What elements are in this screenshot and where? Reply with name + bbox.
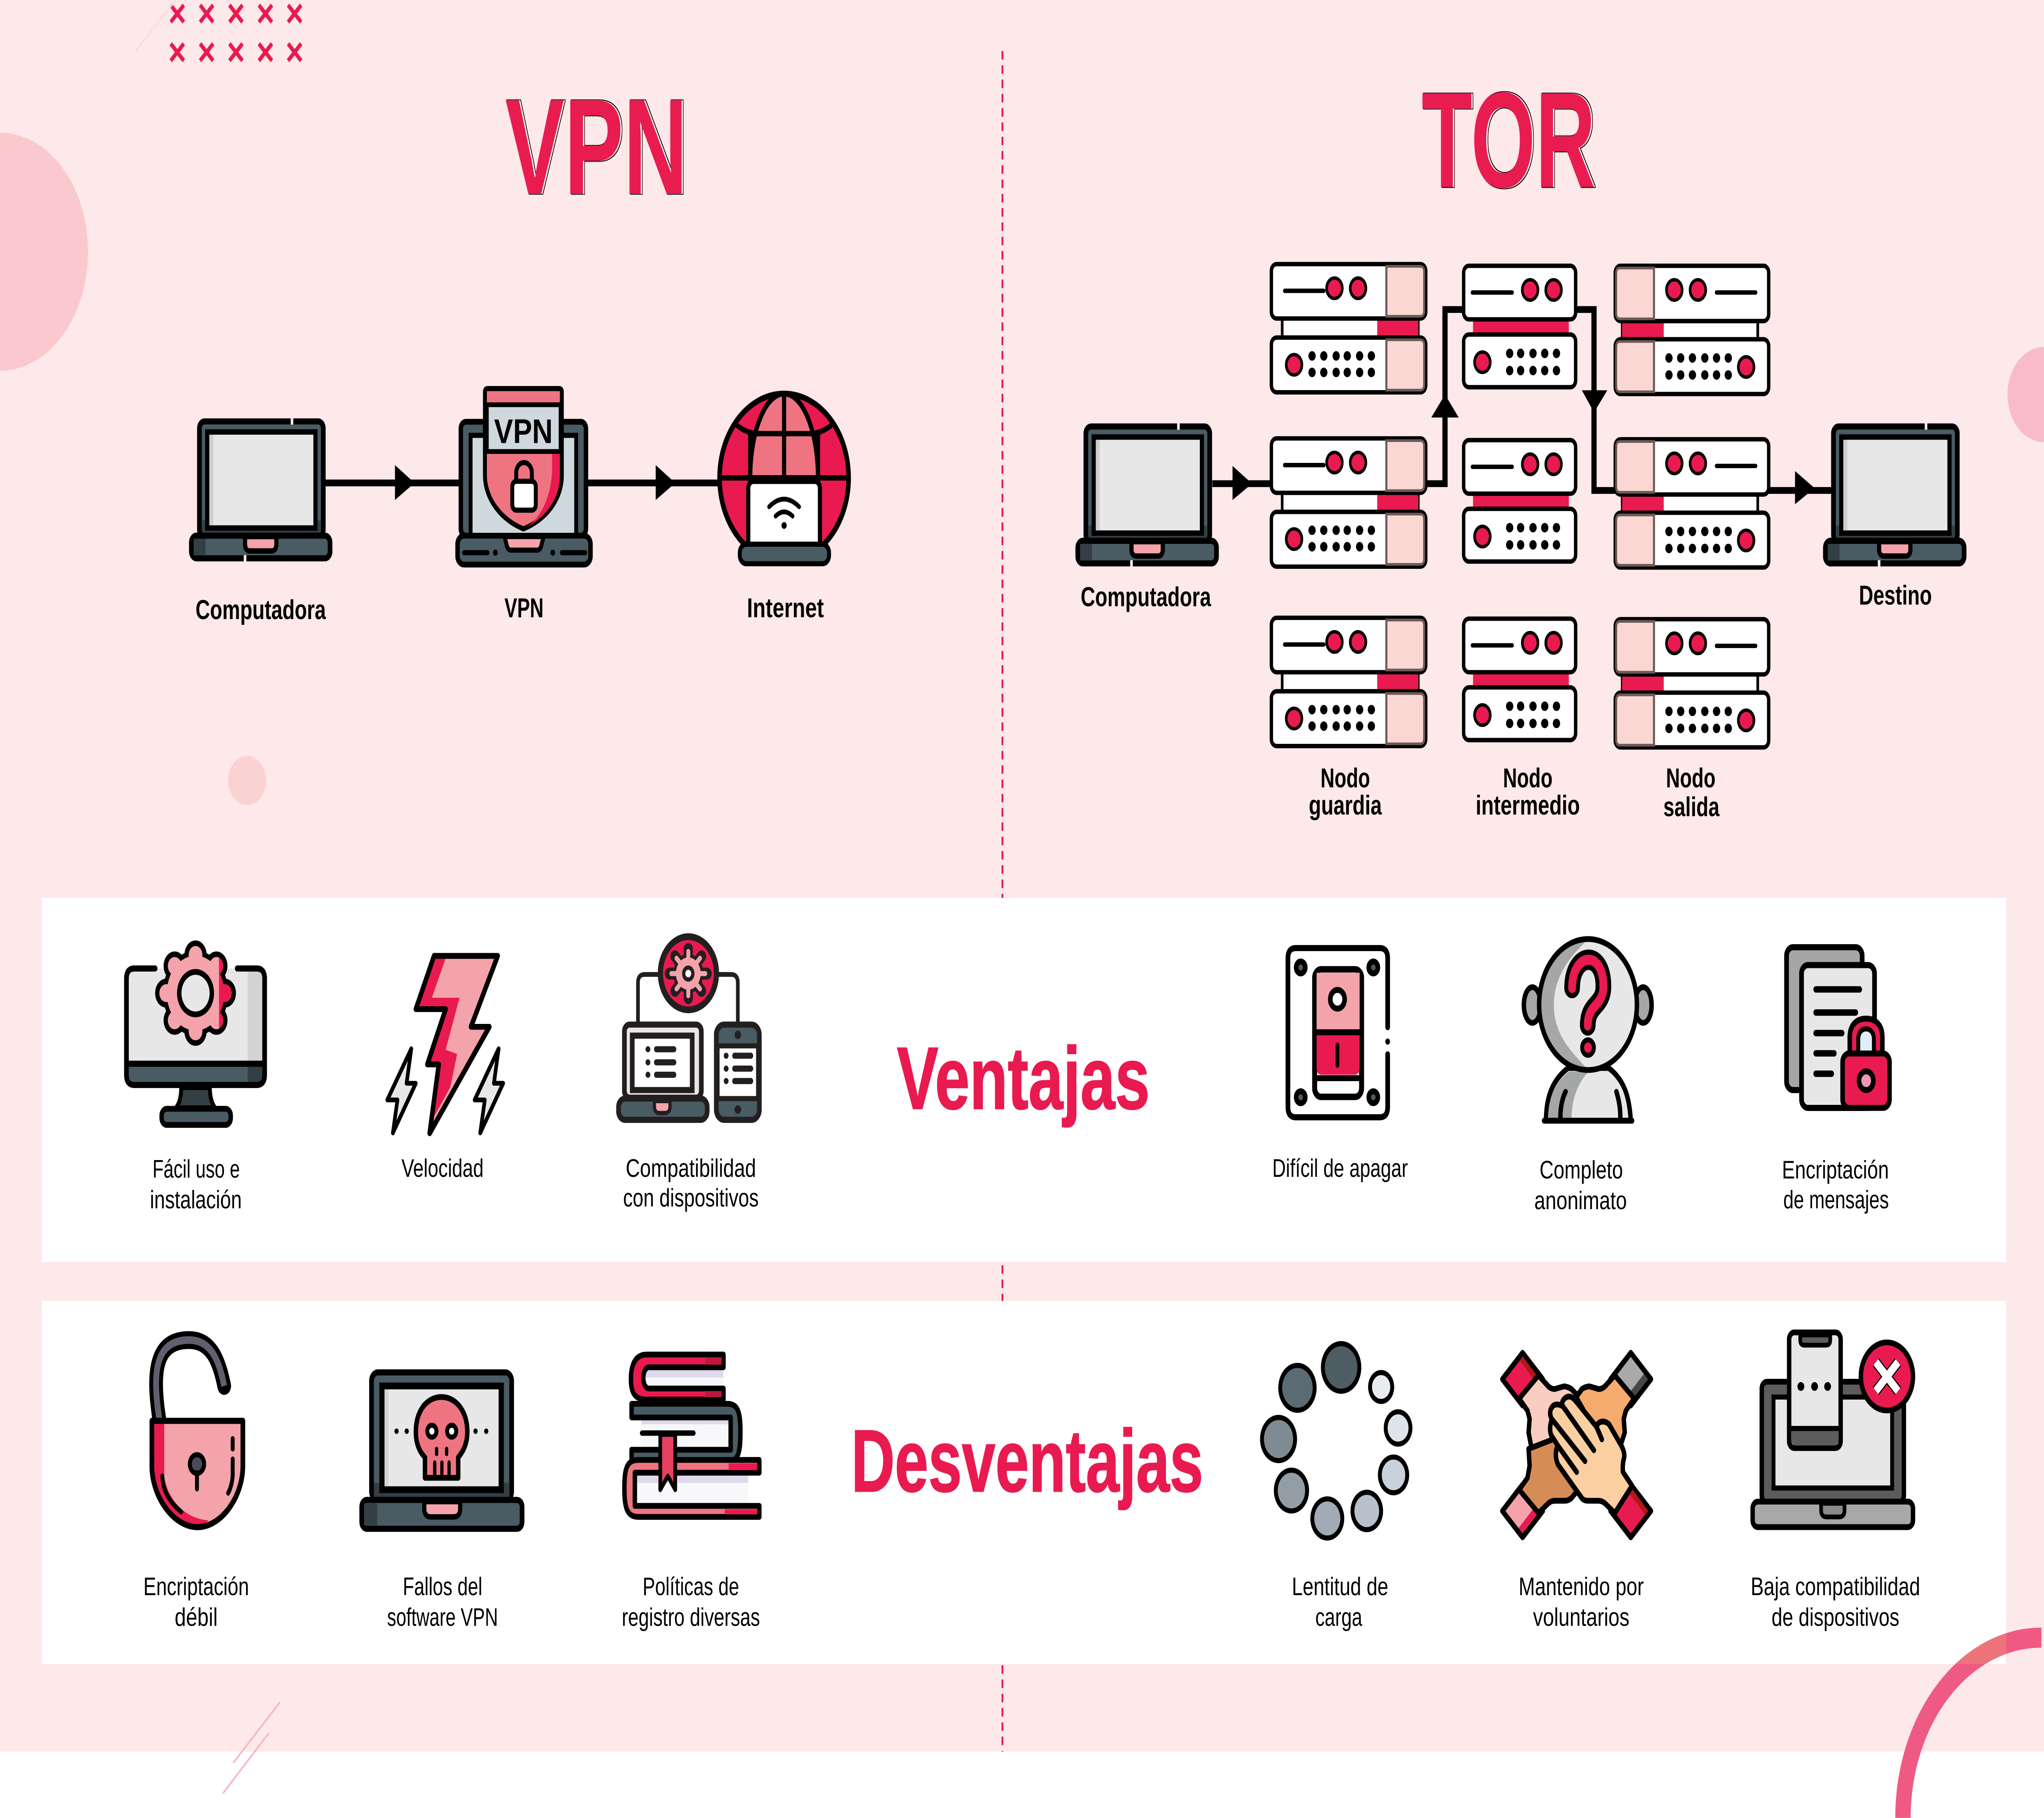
VPN diagram <box>191 388 849 625</box>
label: Computadora: Computadora <box>195 594 326 625</box>
icon: loading spinner <box>1262 1344 1410 1538</box>
sleeve: top left <box>1502 1353 1543 1405</box>
label: Fallos del software VPN: Fallos del <box>403 1572 482 1600</box>
sleeve: top right <box>1611 1353 1651 1405</box>
label: Nodo guardia: guardia <box>1309 790 1382 821</box>
icon: laptop with skull <box>362 1372 522 1529</box>
hand: top left <box>1519 1376 1580 1449</box>
label: Nodo guardia <box>1309 763 1382 821</box>
arrow: computer to guard node <box>1213 466 1272 500</box>
icon: anonymous person <box>1524 939 1652 1121</box>
label: Baja compatibilidad de dispositivos: Baja compatibilidad <box>1751 1572 1920 1600</box>
label: Encriptación débil <box>143 1572 249 1631</box>
decoration: right half circle <box>2008 347 2044 442</box>
icon: devices connected to gear <box>619 937 759 1120</box>
guard nodes <box>1271 264 1426 746</box>
label: Compatibilidad con dispositivos <box>623 1154 759 1212</box>
label: Encriptación de mensajes: Encriptación <box>1782 1156 1889 1184</box>
arrow: computer to VPN <box>323 465 459 500</box>
hand: bottom left <box>1519 1437 1582 1513</box>
label: Encriptación de mensajes <box>1782 1156 1889 1214</box>
decoration: left large half circle <box>0 132 88 371</box>
label: Mantenido por voluntarios <box>1519 1572 1644 1631</box>
label: Mantenido por voluntarios: Mantenido por <box>1519 1572 1644 1600</box>
label: Completo anonimato <box>1534 1156 1627 1214</box>
label: Lentitud de carga: Lentitud de <box>1292 1572 1388 1600</box>
panel: Desventajas <box>42 1301 2006 1664</box>
middle nodes <box>1464 266 1576 740</box>
label: Encriptación débil: Encriptación <box>143 1572 249 1600</box>
panel: Ventajas <box>42 898 2006 1262</box>
label: Nodo salida: salida <box>1663 792 1720 822</box>
label: Compatibilidad con dispositivos: con dispositivos <box>623 1184 759 1212</box>
label: Nodo salida <box>1663 763 1720 822</box>
decoration: corner arc <box>1903 1638 2042 1818</box>
center dashed divider <box>1002 51 1003 1752</box>
label: Fácil uso e instalación: Fácil uso e <box>152 1155 240 1183</box>
label: Lentitud de carga: carga <box>1315 1603 1362 1631</box>
label: Encriptación de mensajes: de mensajes <box>1783 1185 1889 1214</box>
VPN plate text: VPN <box>494 412 553 450</box>
icon: incompatible devices <box>1753 1332 1913 1527</box>
label: Mantenido por voluntarios: voluntarios <box>1533 1603 1629 1631</box>
label: Encriptación débil: débil <box>175 1603 218 1631</box>
label: VPN: VPN <box>504 593 544 623</box>
label: Fácil uso e instalación: instalación <box>150 1185 242 1214</box>
label: Internet: Internet <box>747 593 824 623</box>
label: Completo anonimato: Completo <box>1540 1156 1623 1184</box>
decoration: small circle <box>228 756 266 805</box>
heading: Ventajas: Ventajas <box>897 1029 1150 1128</box>
arrow: VPN to internet <box>588 465 719 500</box>
heading: Desventajas: Desventajas <box>851 1412 1203 1510</box>
label: Nodo intermedio: Nodo <box>1503 763 1553 793</box>
sleeve: bottom left <box>1502 1485 1543 1537</box>
decoration: top thin line <box>136 1 175 51</box>
label: Difícil de apagar: Difícil de apagar <box>1272 1154 1408 1182</box>
label: Nodo guardia: Nodo <box>1320 763 1370 793</box>
finger lines <box>1552 1406 1602 1472</box>
title: TOR: TOR <box>1421 64 1596 216</box>
label: Políticas de registro diversas: registro diversas <box>622 1603 760 1631</box>
label: Fallos del software VPN: software VPN <box>387 1603 498 1631</box>
hand: top right <box>1576 1376 1634 1445</box>
TOR diagram <box>1078 264 1964 822</box>
icon: VPN shield on laptop <box>457 388 591 565</box>
icon: encrypted document <box>1786 947 1889 1108</box>
label: Baja compatibilidad de dispositivos: de dispositivos <box>1772 1603 1899 1631</box>
label: Políticas de registro diversas: Políticas de <box>643 1572 739 1600</box>
decoration: bottom thin lines <box>223 1702 280 1793</box>
icon: volunteer hands <box>1502 1353 1651 1537</box>
icon: lightning bolts <box>387 956 503 1133</box>
label: Destino: Destino <box>1859 580 1932 610</box>
label: Nodo intermedio <box>1476 763 1580 821</box>
sleeve: bottom right <box>1611 1485 1651 1537</box>
label: Políticas de registro diversas <box>622 1572 760 1631</box>
label: Compatibilidad con dispositivos: Compatibilidad <box>626 1154 756 1182</box>
exit nodes <box>1615 266 1769 747</box>
label: Nodo intermedio: intermedio <box>1476 790 1580 821</box>
title: VPN: VPN <box>505 71 688 223</box>
label: Lentitud de carga <box>1292 1572 1388 1631</box>
arrow: middle node through exit to destination <box>1576 310 1833 504</box>
arrow: guard node to middle node <box>1426 310 1464 484</box>
icon: monitor with gear <box>126 951 264 1125</box>
label: Computadora: Computadora <box>1080 581 1211 612</box>
label: Fácil uso e instalación <box>150 1155 242 1214</box>
icon: computer laptop <box>191 422 330 558</box>
label: Baja compatibilidad de dispositivos <box>1751 1572 1920 1631</box>
label: Completo anonimato: anonimato <box>1534 1186 1627 1214</box>
label: Nodo salida: Nodo <box>1666 763 1715 793</box>
icon: power switch <box>1288 948 1390 1117</box>
hand: front <box>1550 1396 1632 1513</box>
label: Fallos del software VPN <box>387 1572 498 1631</box>
icon: destination laptop <box>1825 426 1964 563</box>
icon: open padlock <box>152 1340 243 1527</box>
icon: stack of books <box>624 1355 759 1517</box>
icon: source laptop <box>1078 426 1217 563</box>
label: Velocidad: Velocidad <box>401 1154 484 1182</box>
icon: internet globe <box>719 393 849 564</box>
decoration: cross pattern <box>171 5 301 61</box>
